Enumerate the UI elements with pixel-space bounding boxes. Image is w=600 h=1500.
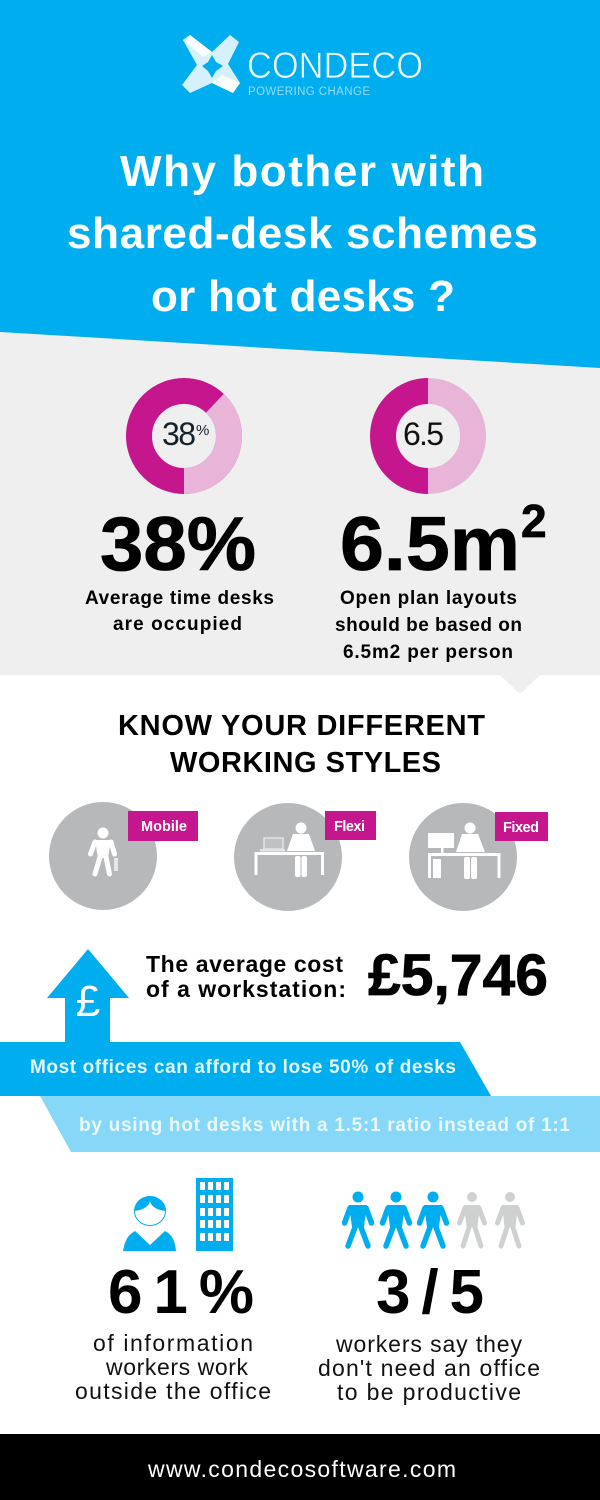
- stat: 61%: 61%: [108, 1258, 254, 1327]
- icon: mobile worker: [49, 802, 198, 910]
- tag: Fixed: Fixed: [503, 820, 539, 836]
- tag: Mobile: Mobile: [141, 819, 187, 835]
- stat caption: open plan: [335, 588, 522, 663]
- stat caption: don't need an office: [318, 1331, 540, 1405]
- donut chart: 38%: 38: [162, 416, 196, 452]
- stat caption: open plan: Open plan layouts: [340, 588, 517, 609]
- banner: hot desk ratio: by using hot desks with a 1.5:1 ratio instead of 1:1: [79, 1115, 570, 1136]
- stat caption: desks occupied: [85, 588, 274, 635]
- banner: lose 50% of desks: Most offices can afford to lose 50% of desks: [30, 1057, 456, 1078]
- banner: hot desk ratio: [40, 1096, 600, 1152]
- footer: www.condecosoftware.com: [147, 1456, 456, 1482]
- icon: flexi worker: [234, 803, 376, 911]
- stat caption: outside the office: [75, 1330, 271, 1404]
- icon: information worker: [123, 1196, 176, 1251]
- stat caption: open plan: should be based on: [335, 615, 522, 636]
- stat caption: open plan: 6.5m2 per person: [343, 642, 513, 663]
- logo tagline: POWERING CHANGE: [248, 86, 370, 98]
- tag: Flexi: [325, 811, 376, 840]
- stat caption: don't need an office: workers say they: [335, 1331, 522, 1357]
- icon: five workers, three highlighted: [344, 1192, 522, 1246]
- arrow: rising cost: £: [76, 977, 100, 1026]
- stat: 6.5m2: 6.5m: [340, 502, 520, 587]
- stat caption: outside the office: outside the office: [75, 1378, 271, 1404]
- header panel: [0, 0, 600, 368]
- stat caption: desks occupied: are occupied: [113, 614, 242, 635]
- text: average cost label: The average cost: [146, 951, 343, 977]
- stat caption: don't need an office: to be productive: [337, 1379, 521, 1405]
- heading: working styles: [118, 710, 485, 779]
- stat caption: desks occupied: Average time desks: [85, 588, 274, 609]
- stat: workstation cost: £5,746: [368, 943, 548, 1008]
- text: average cost label: of a workstation:: [146, 976, 346, 1002]
- icon: office building: [196, 1178, 233, 1251]
- banner: lose 50% of desks: [0, 1042, 491, 1096]
- heading: working styles: WORKING STYLES: [170, 747, 441, 779]
- donut chart: 6.5: 6.5: [403, 416, 444, 452]
- stat: 6.5m2: 2: [521, 495, 547, 547]
- tag: Flexi: Flexi: [334, 819, 365, 835]
- stat caption: outside the office: of information: [93, 1330, 253, 1356]
- arrow: rising cost: [47, 949, 129, 1043]
- donut chart: 38%: %: [196, 422, 209, 439]
- text: average cost label: [146, 951, 346, 1002]
- stat: 3/5: 3/5: [376, 1258, 484, 1327]
- stat caption: outside the office: workers work: [105, 1354, 248, 1380]
- title: shared-desk schemes: [67, 209, 538, 258]
- tag: Mobile: [128, 811, 198, 841]
- title: Why bother with: [120, 147, 484, 196]
- panel: desk statistics: [0, 332, 600, 694]
- title: or hot desks ?: [151, 272, 455, 321]
- heading: working styles: KNOW YOUR DIFFERENT: [118, 710, 485, 742]
- title: [67, 147, 538, 321]
- stat: 38%: 38%: [100, 502, 256, 587]
- logo wordmark: CONDECO: [247, 45, 423, 86]
- footer: [0, 1434, 600, 1500]
- donut chart: 38%: [139, 391, 229, 481]
- icon: Condeco logo mark: [182, 35, 240, 93]
- icon: fixed worker: [409, 803, 548, 911]
- donut chart: 6.5: [383, 391, 473, 481]
- stat caption: don't need an office: don't need an office: [318, 1355, 540, 1381]
